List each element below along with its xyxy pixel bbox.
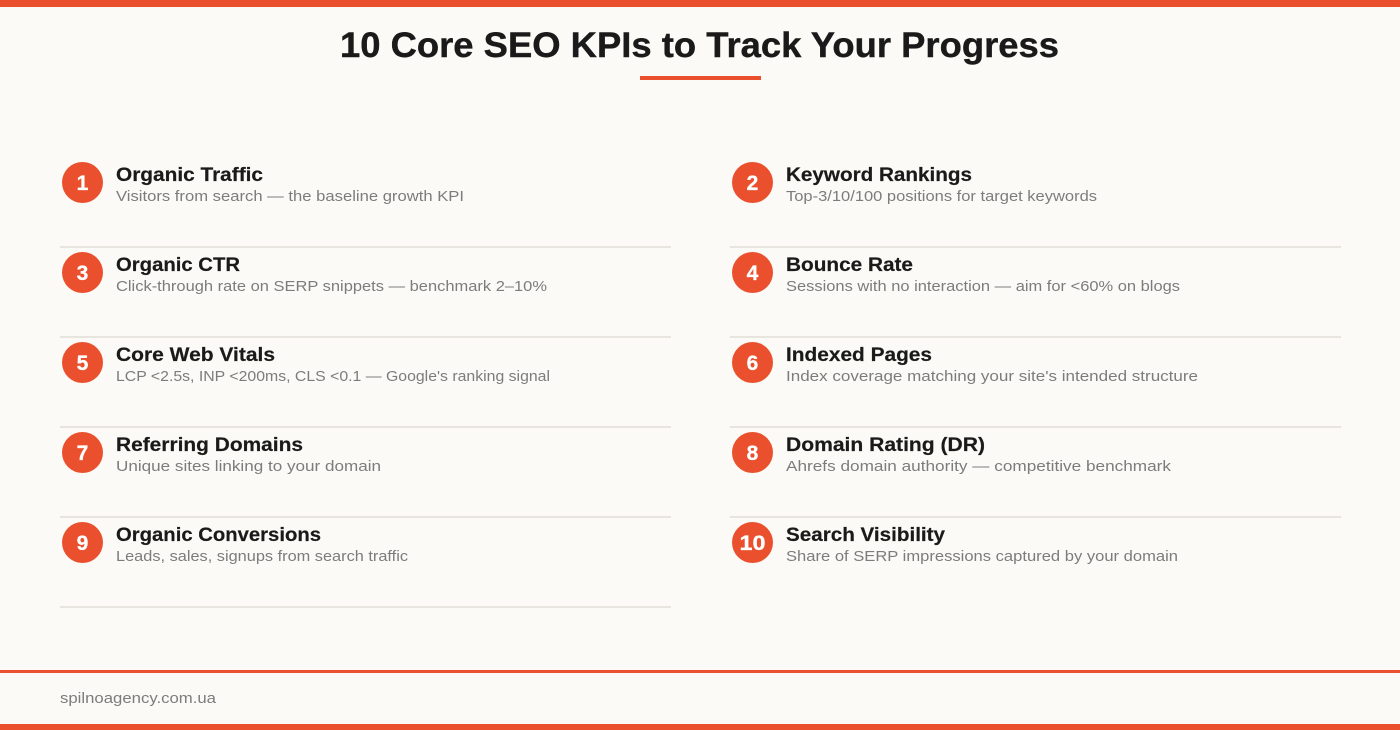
KPI 3: Organic CTR: Organic CTR xyxy=(116,254,240,276)
KPI 7: Referring Domains: 7 xyxy=(77,442,88,465)
title: 10 Core SEO KPIs to Track Your Progress xyxy=(340,26,1059,65)
KPI 6: Indexed Pages: Indexed Pages xyxy=(786,344,932,366)
KPI 4: Bounce Rate: Sessions with no interaction — aim for <60% on blogs xyxy=(786,278,1180,295)
KPI 2: Keyword Rankings xyxy=(730,162,1341,248)
KPI 4: Bounce Rate xyxy=(730,252,1341,338)
KPI 6: Indexed Pages: 6 xyxy=(747,352,758,375)
KPI 1: Organic Traffic: Organic Traffic xyxy=(116,164,263,186)
footer top rule xyxy=(0,670,1400,673)
KPI 1: Organic Traffic xyxy=(60,162,671,248)
KPI 1: Organic Traffic: Visitors from search — the baseline growth KPI xyxy=(116,188,464,205)
KPI 8: Domain Rating (DR) xyxy=(730,432,1341,518)
KPI 9: Organic Conversions xyxy=(60,522,671,608)
KPI 8: Domain Rating (DR): Domain Rating (DR) xyxy=(786,434,985,456)
KPI 1: Organic Traffic: 1 xyxy=(77,172,89,195)
top accent bar xyxy=(0,0,1400,7)
KPI 2: Keyword Rankings: Top-3/10/100 positions for target keywords xyxy=(786,188,1097,205)
KPI 6: Indexed Pages xyxy=(730,342,1341,428)
KPI 5: Core Web Vitals: LCP <2.5s, INP <200ms, CLS <0.1 — Google's ranking signal xyxy=(116,368,550,385)
KPI 4: Bounce Rate: Bounce Rate xyxy=(786,254,913,276)
KPI 7: Referring Domains: Referring Domains xyxy=(116,434,303,456)
KPI 6: Indexed Pages: Index coverage matching your site's intended structure xyxy=(786,368,1198,385)
KPI 8: Domain Rating (DR): Ahrefs domain authority — competitive benchmark xyxy=(786,458,1172,475)
KPI 3: Organic CTR: Click-through rate on SERP snippets — benchmark 2–10% xyxy=(116,278,547,295)
footer source text: spilnoagency.com.ua xyxy=(60,690,217,707)
KPI 7: Referring Domains xyxy=(60,432,671,518)
bottom accent bar xyxy=(0,724,1400,730)
KPI 10: Search Visibility xyxy=(732,522,1178,565)
KPI 5: Core Web Vitals xyxy=(60,342,671,428)
KPI 7: Referring Domains: Unique sites linking to your domain xyxy=(116,458,381,475)
KPI 9: Organic Conversions: Organic Conversions xyxy=(116,524,321,546)
KPI 10: Search Visibility: Search Visibility xyxy=(786,524,945,546)
KPI 2: Keyword Rankings: 2 xyxy=(747,172,758,195)
KPI 4: Bounce Rate: 4 xyxy=(747,262,759,285)
KPI 8: Domain Rating (DR): 8 xyxy=(747,442,759,465)
KPI 5: Core Web Vitals: Core Web Vitals xyxy=(116,344,275,366)
KPI 9: Organic Conversions: 9 xyxy=(77,532,88,555)
KPI 9: Organic Conversions: Leads, sales, signups from search traffic xyxy=(116,548,409,565)
KPI 10: Search Visibility: Share of SERP impressions captured by your domain xyxy=(786,548,1178,565)
title underline xyxy=(640,76,761,80)
KPI 10: Search Visibility: 10 xyxy=(740,532,766,555)
KPI 2: Keyword Rankings: Keyword Rankings xyxy=(786,164,972,186)
KPI 3: Organic CTR xyxy=(60,252,671,338)
KPI 3: Organic CTR: 3 xyxy=(77,262,88,285)
KPI 5: Core Web Vitals: 5 xyxy=(77,352,89,375)
